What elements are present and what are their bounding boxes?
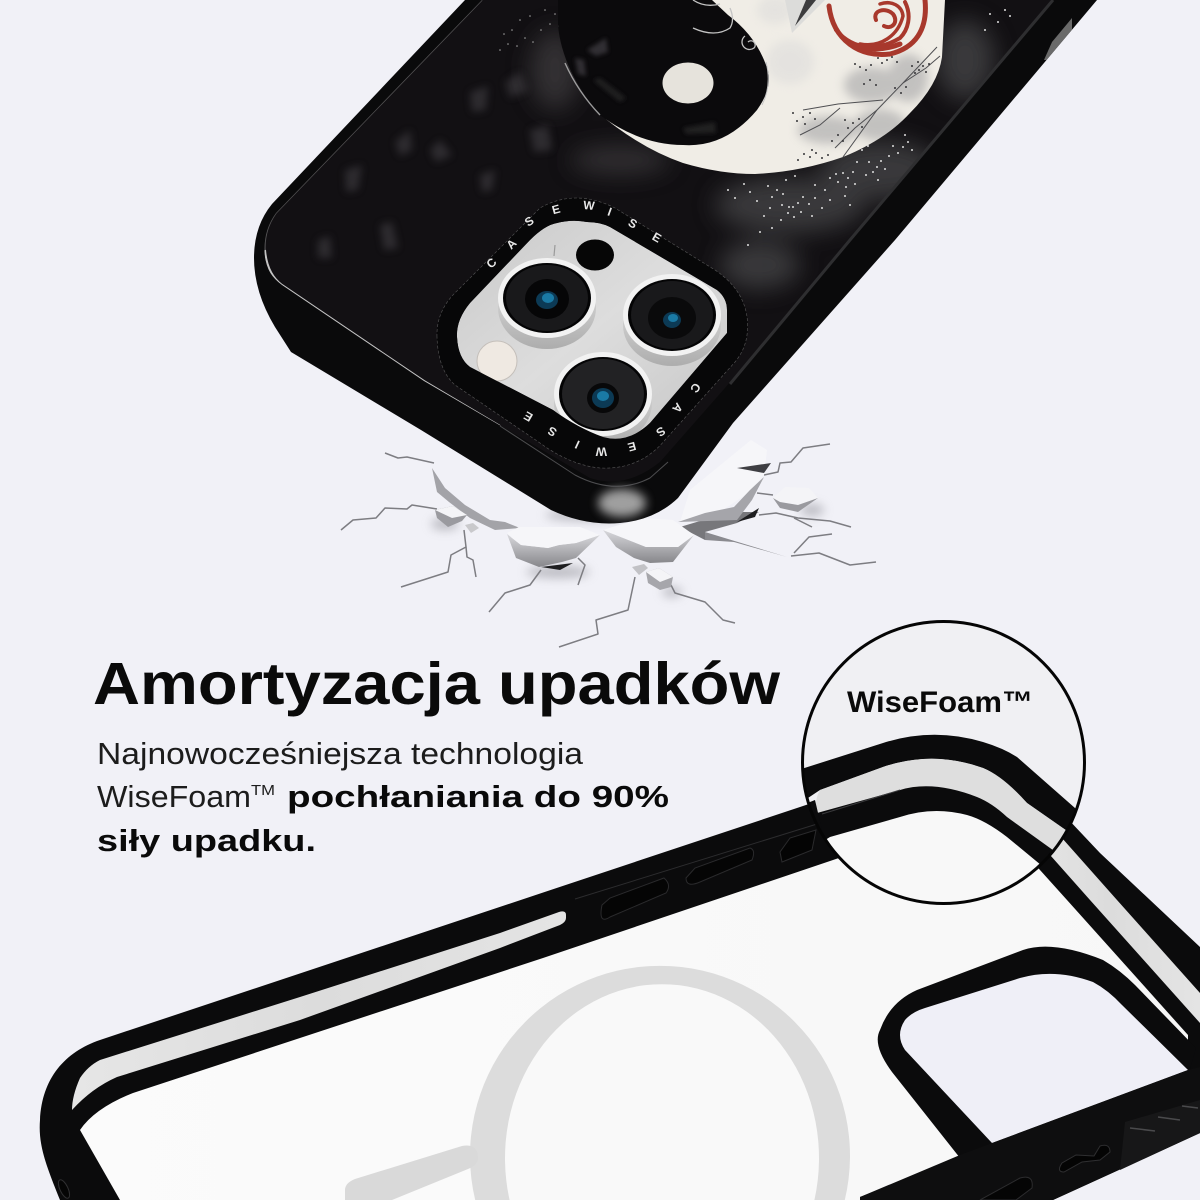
MagSafe ring — [470, 966, 850, 1200]
grey smoke lower right — [715, 20, 995, 289]
volume button 2 — [686, 848, 754, 884]
moon — [558, 0, 945, 174]
lobe edge highlight — [565, 63, 600, 115]
description text: pochłaniania do 90% — [287, 779, 669, 814]
wing dark marks — [795, 0, 816, 26]
lens 2 — [623, 274, 721, 366]
swirl accents on lobe — [693, 0, 768, 105]
moon shading — [757, 0, 928, 144]
description text: Najnowocześniejsza technologia — [97, 736, 584, 771]
camera island — [437, 198, 748, 468]
magnified rim detail — [804, 734, 1076, 864]
CASEWISE text lower: CASEWISE — [521, 380, 704, 458]
center-left chunk — [507, 527, 600, 570]
volume button 1 — [601, 878, 669, 919]
phone with yin-yang case, dropped corner — [250, 0, 1100, 523]
corner reflection — [598, 18, 1072, 517]
center-right chunk — [603, 518, 694, 563]
tree leaf specks — [793, 57, 929, 160]
side edge sheen — [730, 0, 1053, 384]
magnifier ring — [802, 622, 1084, 904]
bezel stitch line — [437, 198, 748, 468]
magnified foam strip — [816, 758, 1066, 850]
band streaks — [1130, 1106, 1198, 1131]
crack wedge right — [705, 532, 787, 557]
description text: siły upadku. — [97, 823, 316, 858]
corner speaker hole — [56, 1178, 72, 1200]
white falling specks — [728, 10, 1010, 245]
soft chunk shadows — [431, 504, 824, 597]
dark glass — [606, 480, 608, 481]
glass highlight upper — [265, 0, 482, 250]
left foam strip — [72, 911, 566, 1110]
dark crack shadow — [737, 508, 759, 522]
clear back panel — [80, 810, 1188, 1200]
WiseFoam label: WiseFoam™ — [847, 686, 1033, 719]
right chunk top and edge — [678, 440, 767, 522]
smoky shards — [318, 72, 552, 258]
port slot — [1059, 1145, 1110, 1172]
small chunk right — [773, 487, 818, 512]
lens 3 — [554, 352, 652, 445]
top specks — [500, 10, 555, 50]
bottom button — [980, 1177, 1032, 1200]
magnified inner rim — [818, 786, 1052, 864]
lobe reflections — [575, 38, 716, 134]
transparent case interior view — [40, 740, 1200, 1200]
WiseFoam magnifier callout — [801, 620, 1086, 905]
island bezel — [437, 198, 748, 468]
right foam strip — [1019, 820, 1200, 1023]
case black frame — [40, 740, 1200, 1200]
side band lighter texture — [1120, 1100, 1200, 1170]
camera opening — [878, 947, 1196, 1158]
lower gloss line — [500, 426, 668, 486]
red swirl — [829, 0, 925, 55]
mute switch — [780, 830, 816, 862]
wing feather — [785, 0, 825, 33]
CASEWISE text upper: CASEWISE — [484, 198, 664, 271]
rim highlight — [822, 790, 900, 814]
dark wedge — [737, 463, 771, 473]
black yin lobe — [558, 0, 769, 145]
grey smoke around yin lobe — [530, 30, 670, 174]
bottom edge band — [860, 1067, 1200, 1200]
real frame stub on the left — [810, 800, 818, 814]
crack band — [680, 512, 759, 540]
MagSafe alignment bar — [345, 1146, 478, 1200]
lens 1 — [498, 258, 596, 349]
crack lines — [341, 444, 876, 647]
title: Amortyzacja upadków — [93, 651, 780, 717]
case back artwork — [264, 0, 1014, 481]
flash — [477, 341, 517, 381]
moon tree branches — [800, 47, 940, 157]
left chunk edge — [432, 468, 520, 530]
white yin dot — [662, 62, 714, 104]
silver camera plate — [457, 221, 727, 439]
magnified clear interior — [790, 811, 1100, 925]
magnifier fill — [802, 622, 1084, 904]
small chunk left — [435, 506, 479, 533]
cracked floor impact — [341, 440, 876, 647]
glass highlight lower — [265, 250, 500, 426]
magnified outer rim — [804, 734, 1076, 830]
phone case rim — [254, 0, 1097, 523]
description text: TM — [251, 782, 275, 799]
microphone hole — [576, 240, 614, 270]
frame seam line — [575, 820, 830, 899]
description text — [97, 736, 669, 858]
description text: WiseFoam — [97, 779, 251, 814]
tiny chunks — [632, 564, 673, 590]
microphone mark — [554, 245, 555, 256]
